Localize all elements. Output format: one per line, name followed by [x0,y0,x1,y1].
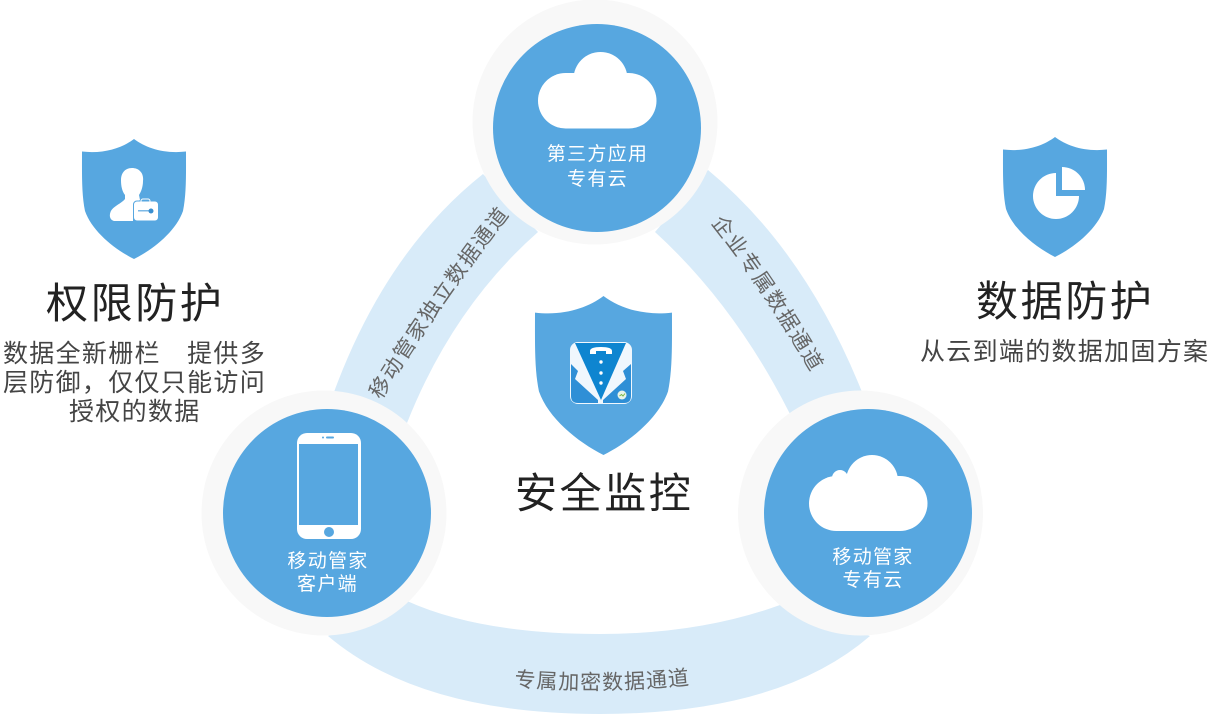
icon: phone [297,433,361,539]
label: left channel: 移动管家独立数据通道 [368,206,510,398]
band: right data channel [655,170,862,414]
caption: manager cloud: 专有云 [843,569,903,591]
caption: third-party cloud: 第三方应用 [547,143,648,165]
label: bottom channel: 专属加密数据通道 [516,668,688,692]
icon: app suit logo [570,342,632,404]
text: permission description: 数据全新栅栏 提供多 [3,340,266,368]
icon: cloud [538,52,656,128]
node: manager cloud [738,390,983,636]
text: permission description: 授权的数据 [69,398,201,426]
heading: security monitoring: 安全监控 [515,470,693,517]
shield: security monitoring [535,296,672,455]
band: left data channel [334,174,538,423]
icon: cloud [809,455,928,531]
shield: permission protection [82,139,186,259]
caption: mobile client: 客户端 [297,573,358,595]
label: right channel: 企业专属数据通道 [711,217,824,372]
caption: manager cloud: 移动管家 [832,546,914,568]
heading: permission protection: 权限防护 [46,280,224,327]
icon: pie chart [1033,167,1085,219]
icon: person with key case [110,168,158,221]
node: third-party cloud [472,0,718,244]
shield: data protection [1003,137,1107,257]
caption: mobile client: 移动管家 [287,550,369,572]
band: bottom data channel [328,601,870,714]
node: mobile client [202,390,446,636]
text: data description: 从云到端的数据加固方案 [920,338,1209,366]
caption: third-party cloud: 专有云 [567,168,628,190]
text: permission description: 层防御，仅仅只能访问 [3,369,266,397]
heading: data protection: 数据防护 [976,278,1154,325]
